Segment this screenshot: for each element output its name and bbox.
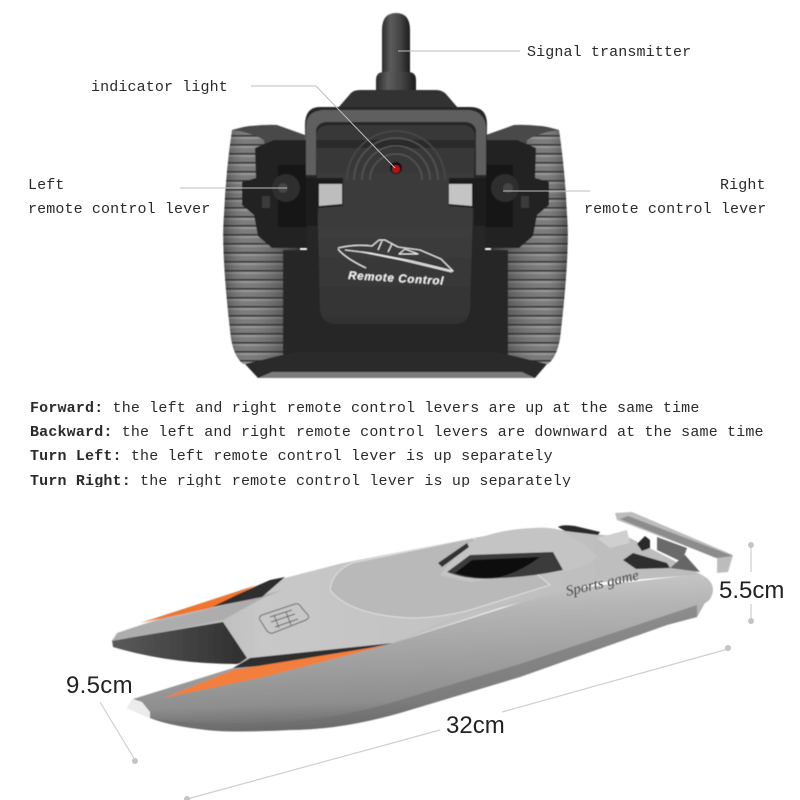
indicator light bbox=[390, 162, 402, 174]
seam line bbox=[393, 574, 700, 643]
upper orange stripe bbox=[140, 585, 257, 623]
upper hull lip bbox=[112, 590, 283, 641]
sports game script: Sports game bbox=[564, 567, 641, 600]
base foot bbox=[245, 352, 547, 378]
round hatch bbox=[330, 538, 550, 618]
speedboat bbox=[112, 512, 733, 732]
left grip bbox=[223, 125, 305, 367]
stern control knob bbox=[637, 536, 650, 551]
callout: indicator light: indicator light bbox=[91, 79, 228, 96]
upper dark accent bbox=[207, 577, 285, 608]
callout: right remote control lever bbox=[503, 177, 766, 218]
control instructions: Turn Left: the left remote control lever is up separately bbox=[30, 448, 553, 465]
right grip bbox=[486, 125, 568, 367]
right silver clip bbox=[449, 184, 472, 206]
left silver clip bbox=[319, 184, 342, 206]
main deck bbox=[117, 528, 700, 668]
control instructions: Turn Right: the right remote control lever is up separately bbox=[30, 473, 571, 490]
dimension: length 32cm bbox=[184, 645, 731, 800]
deck badge bbox=[259, 604, 309, 633]
dimension: height 5.5cm bbox=[719, 542, 784, 624]
right lever housing bbox=[481, 140, 549, 248]
rear wing bbox=[615, 512, 733, 573]
stern vent bbox=[623, 553, 670, 569]
body highlight rim bbox=[306, 110, 486, 175]
remote control label: Remote Control bbox=[348, 270, 445, 288]
callout: indicator light bbox=[91, 79, 395, 168]
dimension: length 32cm: 32cm bbox=[446, 712, 505, 739]
body outer shell bbox=[305, 107, 487, 346]
right lever side panel bbox=[449, 178, 486, 226]
hull bottom shade bbox=[150, 605, 697, 732]
fin bbox=[597, 530, 630, 548]
dimension: height 5.5cm: 5.5cm bbox=[719, 577, 784, 604]
rear hatch bbox=[558, 525, 600, 535]
front face bbox=[316, 125, 475, 324]
dimension: width 9.5cm bbox=[66, 672, 138, 764]
callout: right remote control lever: remote control lever bbox=[584, 201, 766, 218]
left lever side panel bbox=[306, 178, 343, 226]
lower orange stripe bbox=[163, 645, 387, 698]
boat logo bbox=[338, 240, 453, 272]
callout: left remote control lever: remote control lever bbox=[28, 201, 210, 218]
callout: signal transmitter: Signal transmitter bbox=[527, 44, 691, 61]
control instructions: Forward: the left and right remote control levers are up at the same time bbox=[30, 400, 700, 417]
stern trim bbox=[670, 555, 700, 572]
cockpit canopy bbox=[440, 528, 597, 582]
antenna bbox=[376, 13, 416, 92]
hull side bbox=[127, 574, 713, 732]
upper hull notch interior bbox=[112, 620, 250, 664]
lower dark accent bbox=[233, 643, 393, 668]
windshield bbox=[438, 543, 563, 579]
callout: right remote control lever: Right bbox=[720, 177, 766, 194]
control instructions: Backward: the left and right remote control levers are downward at the same time bbox=[30, 424, 764, 441]
left lever housing bbox=[242, 140, 310, 248]
face shadow band bbox=[316, 140, 476, 148]
dimension: width 9.5cm: 9.5cm bbox=[66, 672, 133, 699]
callout: left remote control lever bbox=[28, 177, 287, 218]
bow tip highlight bbox=[127, 699, 150, 718]
remote control transmitter bbox=[223, 13, 568, 378]
signal arcs emblem bbox=[347, 131, 445, 180]
inner stand shadow bbox=[283, 250, 508, 360]
control instructions bbox=[30, 400, 764, 490]
body shoulder bbox=[338, 90, 458, 108]
callout: left remote control lever: Left bbox=[28, 177, 64, 194]
